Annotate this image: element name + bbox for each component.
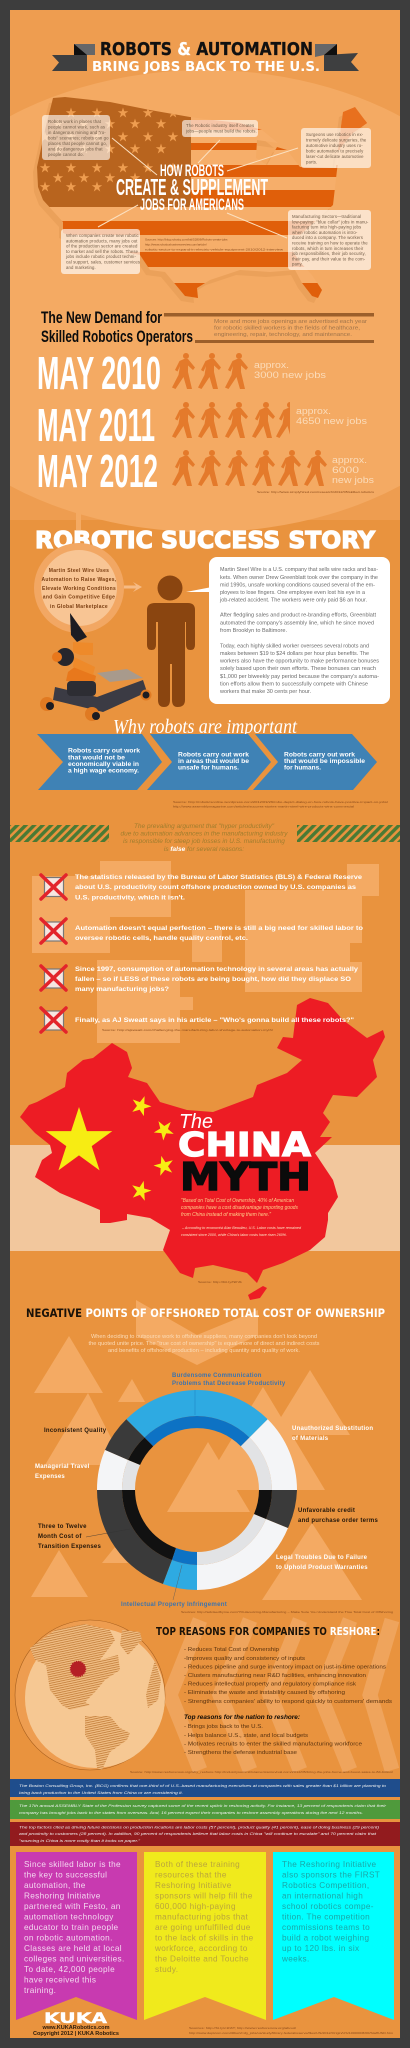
story text: makes between $19 to $24 dollars per hour plus benefits. The bbox=[220, 651, 369, 657]
robot illustration bbox=[40, 613, 152, 721]
South America bbox=[85, 1716, 130, 1770]
map sources: robotic-sector-to-expand-in-electric-vehicle-equipment-2010/2012-interview bbox=[145, 248, 284, 252]
circle callout: Martin Steel Wire: Martin Steel Wire Uses bbox=[49, 568, 109, 574]
banner: Festo training: automation technology bbox=[24, 1912, 114, 1922]
banner: FIRST robotics: up to 120 lbs. in six bbox=[282, 1944, 359, 1953]
KUKA logo: KUKA bbox=[44, 2011, 107, 2027]
banner: Festo training: educator to train people bbox=[24, 1923, 119, 1932]
banner: training resources: resources that the bbox=[155, 1870, 227, 1880]
callout: dangerous work: people cannot work, such as bbox=[48, 124, 105, 130]
company reasons list: - Clusters manufacturing near R&D facilities, enhancing innovation bbox=[184, 1673, 366, 1679]
segment: managerial travel bbox=[97, 1450, 128, 1490]
reason 2 bbox=[41, 919, 363, 943]
banner: training resources: workforce, according to bbox=[154, 1944, 248, 1953]
banner: FIRST robotics: Robotics Competition, bbox=[282, 1881, 369, 1890]
section heading: The New Demand for bbox=[41, 308, 162, 327]
banner: training resources: manufacturing jobs that bbox=[155, 1912, 249, 1922]
chevron sources: http://www.assemblymagazine.com/articles/success-stories-martin-steel-wire-products-wins-commercial bbox=[173, 804, 354, 808]
segment: intellectual property bbox=[163, 1560, 197, 1590]
chevron: high wage economy bbox=[37, 734, 162, 790]
hyper productivity statement: is responsible for steep job losses in U.S. manufacturing bbox=[123, 838, 285, 845]
hazard stripes bbox=[10, 825, 400, 842]
story text: kets. When owner Drew Greenblatt took over the company in the bbox=[220, 575, 378, 581]
banner: Festo training: automation, the bbox=[24, 1881, 86, 1890]
callout: dangerous work: people cannot do. bbox=[48, 152, 84, 157]
banner: FIRST robotics: build a robot weighing bbox=[282, 1934, 369, 1942]
banner: Festo training: on robotic automation. bbox=[24, 1934, 113, 1942]
banner: Festo training: Classes are held at local bbox=[24, 1944, 122, 1953]
banner: Festo training: training. bbox=[24, 1986, 56, 1995]
callout: manufacturing sectors: Manufacturing Sectors—traditional bbox=[292, 214, 361, 219]
story text: job-related accident. The workers were only paid $6 an hour. bbox=[219, 598, 367, 604]
nation reasons list: - Strengthens the defense industrial base bbox=[184, 1750, 297, 1756]
label: transition: Three to Twelve bbox=[38, 1524, 87, 1530]
segment: transition expenses bbox=[97, 1490, 172, 1584]
KUKA credits: Copyright 2012 | KUKA Robotics bbox=[33, 2031, 119, 2037]
nation reasons list bbox=[184, 1715, 362, 1756]
China myth quote: "Based on Total Cost of Ownership, 40% of American bbox=[181, 1198, 294, 1204]
callout: surgeons: parts. bbox=[306, 160, 317, 164]
chevron: impossible for humans: for humans. bbox=[284, 766, 321, 772]
segment: legal troubles bbox=[197, 1519, 288, 1590]
negative points intro bbox=[88, 1334, 320, 1354]
row: May 2012 bbox=[37, 445, 375, 497]
callout connector lines bbox=[98, 138, 298, 238]
heading line 1: ROBOTS & AUTOMATION bbox=[100, 40, 313, 60]
background shapes: chevron and triangles bbox=[31, 1300, 362, 1600]
footer sources: http://www.deptcom.com/dilbert/mfg_jobs/us/study/library-federalreserve/files/US/2012/Origin/US/100000/8/00/StaffUSD.htm bbox=[189, 2031, 394, 2035]
callout: robotics industry: jobs—people must build the robots. bbox=[185, 128, 257, 134]
callout: manufacturing sectors: their pay, and their value to the com- bbox=[292, 256, 366, 261]
banner: FIRST robotics: an international high bbox=[282, 1892, 363, 1900]
flag stars bbox=[46, 1093, 178, 1202]
chevron: impossible for humans: that would be impossible bbox=[284, 759, 366, 765]
nation reasons list: - Brings jobs back to the U.S. bbox=[184, 1724, 263, 1730]
donut chart bbox=[97, 1390, 297, 1590]
chevron: high wage economy: Robots carry out work bbox=[68, 749, 141, 755]
banner: FIRST robotics: also sponsors the FIRST bbox=[282, 1870, 380, 1880]
label: credit: and purchase order terms bbox=[298, 1518, 378, 1524]
reason 3 bbox=[41, 966, 358, 993]
title banner bbox=[52, 40, 359, 75]
banner: Festo training: Since skilled labor is the bbox=[24, 1860, 121, 1869]
US flag map bbox=[30, 90, 380, 305]
callout: manufacturing sectors: job responsibilities, their job security, bbox=[291, 251, 366, 256]
callout: manufacturing sectors: robots, which in turn increases their bbox=[292, 246, 364, 251]
hyper productivity statement: The prevailing argument that "hyper productivity" bbox=[134, 823, 275, 830]
KUKA credits bbox=[33, 2025, 119, 2037]
label: credit: Unfavorable credit bbox=[298, 1508, 355, 1514]
chevron sources bbox=[173, 800, 388, 808]
reason 4: Finally, as AJ Sweatt says in his article – "Who's gonna build all these robots?" bbox=[75, 1017, 354, 1024]
callout: new products: automation products, many jobs out bbox=[66, 238, 138, 243]
China map bbox=[20, 998, 385, 1300]
section intro: More and more jobs openings are advertised each year bbox=[214, 319, 367, 325]
circle callout: Martin Steel Wire bbox=[34, 543, 124, 633]
icon: crossed checkbox bbox=[41, 875, 66, 899]
callout: manufacturing sectors: when robotic automation is intro- bbox=[292, 230, 358, 235]
chevron: impossible for humans bbox=[253, 734, 377, 790]
map sources: Sources: http://blog.robotiq.com/bid/52806/Robots-create-jobs bbox=[145, 238, 228, 242]
hyper productivity statement bbox=[121, 823, 288, 853]
row: May 2011: 4650 new jobs bbox=[296, 416, 368, 426]
section heading bbox=[41, 308, 193, 346]
chevron: high wage economy: a high wage economy. bbox=[68, 769, 139, 775]
negative points intro: and benefits of offshored production – including quantity and quality of work. bbox=[108, 1348, 300, 1354]
worker figure bbox=[147, 576, 195, 707]
ribbon right bbox=[315, 44, 359, 71]
band: top factors: "sourcing in China is more costly than it looks on paper." bbox=[19, 1839, 141, 1843]
story text: workers also have the opportunity to make performance bonuses bbox=[220, 658, 380, 664]
segment: inconsistent quality bbox=[105, 1419, 144, 1460]
Africa edge bbox=[146, 1660, 161, 1708]
icon: location burst bbox=[70, 1662, 86, 1676]
label: communication: Problems that Decrease Productivity bbox=[172, 1381, 286, 1387]
callout: surgeons: laser-cut delicate automotive bbox=[306, 154, 364, 159]
band: Boston Consulting Group: The Boston Consulting Group, Inc. (BCG) confirms that one-third of of U.S.-based manufacturing executives at companies with sales greater than $1 billion are planning to bbox=[19, 1784, 386, 1788]
reason 2: Automation doesn't equal perfection – there is still a big need for skilled labor to bbox=[75, 925, 363, 932]
China myth quote: from China instead of making them here." bbox=[181, 1212, 271, 1218]
chevron: impossible for humans: Robots carry out work bbox=[284, 752, 356, 758]
circle callout: Martin Steel Wire: in Global Marketplace bbox=[50, 604, 108, 610]
callout: new products: to market and sell the robots. These bbox=[66, 249, 139, 254]
band: Assembly survey: The 17th annual ASSEMBLY State of the Profession survey captured some of the recent uptick in reshoring activity. For instance, 13 percent of respondents claim that their bbox=[19, 1804, 387, 1808]
heading: how robots create and supplement: HOW ROBOTS bbox=[160, 162, 224, 180]
callout: manufacturing sectors: receive training on how to operate the bbox=[292, 240, 368, 246]
chevron sources: Source: http://roboticsonline.wordpress.com/2012/03/26/robo-depict-dialog-on-how-robots-have-positive-impact-on-jobs/ bbox=[173, 800, 388, 804]
chevron: unsafe for humans: Robots carry out work bbox=[178, 752, 250, 758]
band: Boston Consulting Group: bring back production to the United States from China or are considering it. bbox=[19, 1791, 183, 1795]
callout: surgeons: automotive industry uses ro- bbox=[306, 143, 363, 148]
flag fill bbox=[37, 97, 367, 298]
circle callout: Martin Steel Wire: Elevate Working Conditions bbox=[42, 586, 116, 592]
row: May 2010: MAY 2010 bbox=[37, 347, 161, 399]
heading: top reasons: TOP REASONS FOR COMPANIES TO RESHORE: bbox=[156, 1625, 380, 1638]
callout: dangerous work bbox=[42, 115, 110, 160]
map sources: http://www.roboticsbusinessreview.com/article/ bbox=[145, 242, 207, 246]
label: quality: Inconsistent Quality bbox=[44, 1428, 107, 1434]
label: travel: Managerial Travel bbox=[35, 1464, 90, 1470]
reason 1: The statistics released by the Bureau of Labor Statistics (BLS) & Federal Reserve bbox=[75, 874, 362, 881]
row: May 2012: approx. bbox=[332, 455, 367, 465]
banner: training resources: to the lack of skills in the bbox=[155, 1934, 254, 1942]
reason 1 bbox=[41, 874, 362, 902]
story speech bubble bbox=[186, 557, 390, 704]
circle callout: Martin Steel Wire: and Gain Competitive Edge bbox=[43, 594, 115, 600]
banner: training resources: Reshoring Initiative bbox=[155, 1881, 232, 1890]
callout: new products: cal support, sales, customer services bbox=[66, 260, 140, 264]
banner: Festo training: Reshoring Initiative bbox=[24, 1892, 101, 1900]
story text: automated the company's assembly line, which he since moved bbox=[220, 620, 374, 626]
China source: Source: http://bit.ly/NIhf1 bbox=[198, 1280, 242, 1284]
callout: manufacturing sectors: facturing turn into high-paying jobs bbox=[292, 225, 361, 230]
banner: FIRST robotics: The Reshoring Initiative bbox=[282, 1860, 377, 1869]
row: May 2012: new jobs bbox=[332, 475, 375, 485]
China myth quote bbox=[181, 1198, 302, 1237]
icon: crossed checkbox bbox=[41, 1008, 66, 1032]
story text: Martin Steel Wire is a U.S. company that sells wire racks and bas- bbox=[220, 567, 378, 573]
company reasons list: - Eliminates the waste and instability caused by offshoring bbox=[184, 1690, 345, 1696]
callout: robotics industry: The Robotic industry itself creates bbox=[186, 123, 254, 128]
company reasons list: - Reduces Total Cost of Ownership bbox=[184, 1647, 279, 1653]
China myth quote: companies have a cost disadvantage importing goods bbox=[181, 1205, 298, 1211]
row: May 2012: 6000 bbox=[332, 465, 359, 475]
negative points intro: the quoted unite price. The "true cost of ownership" is equal-more of direct and indirect costs bbox=[88, 1341, 320, 1347]
chevron: unsafe for humans bbox=[147, 734, 271, 790]
section intro: for robotic skilled workers in the fields of healthcare, bbox=[214, 326, 360, 332]
section intro: engineering, repair, technology, and maintenance. bbox=[214, 332, 352, 338]
heading: why robots are important: Why robots are important bbox=[113, 716, 297, 738]
icon: crossed checkbox bbox=[41, 919, 66, 943]
reason 3: fallen – so if LESS of these robots are being bought, how did they displace SO bbox=[75, 976, 351, 983]
reason 2: oversee robotic cells, handle quality control, etc. bbox=[75, 935, 248, 942]
callout: robotics industry bbox=[182, 120, 258, 137]
robot column bbox=[67, 681, 96, 696]
callout: manufacturing sectors: pany. bbox=[292, 262, 303, 267]
KUKA credits: www.KUKARobotics.com bbox=[41, 2025, 110, 2031]
banner: training resources: the Deloitte and Touche bbox=[155, 1954, 249, 1964]
section heading: Skilled Robotics Operators bbox=[41, 327, 193, 346]
China myth title: The bbox=[179, 1111, 213, 1133]
negative points intro: When deciding to outsource work to offshore suppliers, many companies don't look beyond bbox=[91, 1334, 317, 1340]
band: top factors: The top factors cited as driving future decisions on production locations are labor costs (57 percent), product quality (41 percent), ease of doing business (29 percent) bbox=[19, 1826, 380, 1830]
robot platform bbox=[97, 669, 143, 682]
band: Boston Consulting Group bbox=[10, 1779, 400, 1797]
callout: dangerous work: in dangerous mining and "ro- bbox=[48, 130, 106, 135]
banner: training resources bbox=[144, 1852, 266, 2020]
row: May 2011: MAY 2011 bbox=[37, 399, 155, 451]
story text: solely based upon their own efforts. These bonuses can reach bbox=[220, 666, 376, 672]
donut source: Sources: http://advisedbyme.com/?Outsourcing-Manufacturing – Make Sure You Understand the True Total Cost of Offshoring bbox=[181, 1610, 393, 1614]
chevron: high wage economy: economically viable in bbox=[68, 762, 139, 768]
China myth title: CHINA bbox=[178, 1125, 312, 1164]
icon: crossed checkbox bbox=[41, 966, 66, 990]
reshore source: Source: http://www.reshorenow.org/why_reshore http://industrysummitforamericanrevival.com/2012/05/bring-the-jobs-home-and-boost-sales-to-84-billion/ bbox=[130, 1770, 393, 1774]
label: travel: Expenses bbox=[35, 1474, 65, 1480]
segment: unfavorable credit bbox=[266, 1490, 297, 1528]
callout: surgeons bbox=[301, 128, 371, 168]
heading: robotic success story: ROBOTIC SUCCESS STORY bbox=[35, 528, 375, 554]
hyper productivity statement: is false for several reasons: bbox=[164, 846, 244, 853]
callout: dangerous work: places that people cannot go, bbox=[48, 141, 107, 146]
banner: training resources: are going unfulfilled due bbox=[155, 1923, 251, 1932]
heading: how robots create and supplement: CREATE & SUPPLEMENT bbox=[116, 174, 268, 200]
map shadow bbox=[33, 102, 363, 303]
callout: surgeons: tremely delicate surgeries, the bbox=[306, 138, 367, 142]
company reasons list: - Strengthens companies' ability to respond quickly to customers' demands bbox=[184, 1699, 392, 1705]
banner: FIRST robotics bbox=[273, 1852, 394, 2020]
reason 1: U.S. productivity, which it isn't. bbox=[75, 894, 185, 902]
Hainan bbox=[248, 1286, 267, 1300]
chevron: high wage economy: that would not be bbox=[68, 755, 126, 761]
label: substitution: of Materials bbox=[292, 1436, 329, 1442]
callout: manufacturing sectors: low-paying, "blue collar" jobs in manu- bbox=[292, 219, 369, 224]
callout: dangerous work: bots" scenarios; robots can go bbox=[48, 136, 109, 140]
callout: new products: and marketing. bbox=[66, 265, 96, 270]
story text: tion efforts allow them to successfully compete with Chinese bbox=[220, 682, 368, 688]
banner: training resources: Both of these training bbox=[155, 1860, 240, 1869]
row: May 2012: MAY 2012 bbox=[37, 445, 158, 497]
banner: FIRST robotics: tition. The competition bbox=[282, 1912, 370, 1922]
banner: FIRST robotics: commissions teams to bbox=[282, 1923, 370, 1932]
label: transition: Transition Expenses bbox=[38, 1544, 102, 1550]
North America bbox=[30, 1624, 120, 1710]
label: substitution: Unauthorized Substitution bbox=[292, 1426, 373, 1432]
label: communication: Burdensome Communication bbox=[172, 1373, 262, 1379]
nation reasons list: Top reasons for the nation to reshore: bbox=[184, 1715, 300, 1721]
callout: new products: When companies create new robotic bbox=[66, 233, 140, 238]
band: top factors bbox=[10, 1822, 400, 1846]
company reasons list: -Improves quality and consistency of inputs bbox=[184, 1656, 305, 1662]
banner: training resources: study. bbox=[155, 1965, 178, 1974]
globe bbox=[15, 1620, 165, 1770]
story text: workers that make 30 cents per hour. bbox=[220, 689, 311, 695]
story text: from Brooklyn to Baltimore. bbox=[220, 628, 287, 634]
banner: FIRST robotics: weeks. bbox=[281, 1954, 310, 1964]
callout: surgeons: Surgeons use robotics in ex- bbox=[306, 132, 364, 137]
label: IP: Intellectual Property Infringement bbox=[121, 1602, 227, 1608]
lighter block pattern bbox=[32, 861, 379, 1043]
story text: After fledgling sales and product re-branding efforts, Greenblatt bbox=[220, 612, 377, 618]
background chevrons bbox=[170, 1620, 392, 1770]
story text: ployees to lose fingers. One employee even lost his eye in a bbox=[220, 590, 365, 596]
story text: mid 1990s, unsafe working conditions caused several of the em- bbox=[220, 582, 375, 588]
callout: new products: jobs include robotic product techni- bbox=[65, 254, 136, 259]
footer sources: Sources: http://ht.ly/c1b6T; http://www.reshorenow.org/about/ bbox=[189, 2026, 296, 2030]
callout: dangerous work: Robots work in places that bbox=[48, 119, 102, 124]
callout: surgeons: botic automation to precisely bbox=[306, 148, 364, 154]
company reasons list: - Reduces pipeline and surge inventory impact on just-in-time operations bbox=[184, 1664, 386, 1670]
source: Source: http://www.simplyhired.com/research/2012/05/skilled-robotics bbox=[257, 490, 375, 494]
label: warranties: Legal Troubles Due to Failure bbox=[276, 1555, 368, 1561]
banner: FIRST robotics: school robotics compe- bbox=[282, 1902, 374, 1911]
banner: training resources: 600,000 high-paying bbox=[155, 1902, 236, 1911]
reason 1: about U.S. productivity count offshore production owned by U.S. companies as bbox=[75, 884, 356, 891]
nation reasons list: - Helps balance U.S., state, and local budgets bbox=[184, 1733, 308, 1739]
band: top factors: and proximity to customers (28 percent). In addition, 90 percent of respondents believe that labor costs in China "will continue to escalate" and 70 percent claim that bbox=[19, 1832, 377, 1836]
segment: communication bbox=[126, 1390, 268, 1438]
callout: new products: of the production sector are created bbox=[66, 244, 138, 249]
China myth quote: – According to economist Alan Beaulieu, U.S. Labor costs have remained bbox=[181, 1226, 302, 1230]
reason 4 bbox=[41, 1008, 354, 1032]
company reasons list bbox=[184, 1647, 392, 1705]
wheels bbox=[40, 690, 152, 721]
story text bbox=[219, 567, 380, 695]
row: May 2011 bbox=[38, 402, 367, 442]
callout: manufacturing sectors bbox=[288, 210, 371, 270]
banner: Festo training bbox=[16, 1852, 137, 2020]
ribbon left bbox=[52, 44, 95, 71]
China myth title bbox=[178, 1111, 312, 1199]
band: Assembly survey: company has brought jobs back to the states from overseas. And, 16 percent expect their companies to reshore assembly operations during the next 12 months. bbox=[19, 1811, 363, 1815]
segment: unauthorized substitution bbox=[250, 1419, 297, 1490]
heading: how robots create and supplement bbox=[116, 162, 268, 214]
story text: Today, each highly skilled worker oversees several robots and bbox=[220, 644, 369, 650]
banner: Festo training: colleges and universities. bbox=[24, 1954, 125, 1964]
label: transition: Month Cost of bbox=[38, 1534, 82, 1540]
banner: Festo training: To date, 42,000 people bbox=[24, 1965, 115, 1974]
band: Assembly survey bbox=[10, 1800, 400, 1819]
Greenland bbox=[120, 1630, 142, 1655]
banner: Festo training: partnered with Festo, an bbox=[24, 1902, 121, 1911]
callout: dangerous work: and do dangerous jobs that bbox=[48, 146, 103, 152]
reason 4: Source: http://ajsweatt.com/challenging-the-manufacturing-labor-shortage-to-automation-myth/ bbox=[102, 1028, 273, 1032]
China myth title: MYTH bbox=[180, 1155, 311, 1199]
reason 3: many manufacturing jobs? bbox=[75, 986, 169, 993]
section intro bbox=[214, 319, 367, 338]
China myth band bbox=[10, 1145, 400, 1251]
callout: manufacturing sectors: duced into a company. The workers bbox=[292, 235, 363, 240]
arrow to worker bbox=[124, 582, 142, 592]
banner: training resources: sponsors will help fill the bbox=[155, 1892, 253, 1900]
section: skilled robotics operators bbox=[37, 308, 375, 497]
nation reasons list: - Motivates recruits to enter the skilled manufacturing workforce bbox=[184, 1742, 362, 1748]
callout: new products bbox=[61, 229, 140, 274]
chevron: unsafe for humans: unsafe for humans. bbox=[178, 766, 239, 772]
label: warranties: to Uphold Product Warranties bbox=[276, 1565, 368, 1571]
map sources bbox=[145, 238, 284, 252]
row: May 2010: approx. bbox=[254, 360, 289, 370]
row: May 2010: 3000 new jobs bbox=[254, 370, 327, 380]
chevron: unsafe for humans: in areas that would be bbox=[178, 759, 250, 765]
robot arm bbox=[52, 613, 96, 681]
reason 3: Since 1997, consumption of automation technology in several areas has actually bbox=[75, 966, 358, 973]
company reasons list: - Reduces intellectual property and regulatory compliance risk bbox=[184, 1682, 356, 1688]
banner: Festo training: have received this bbox=[24, 1976, 96, 1984]
hyper productivity statement: due to automation advances in the manufacturing industry bbox=[121, 830, 288, 838]
heading line 2: BRING JOBS BACK TO THE U.S. bbox=[92, 59, 320, 75]
story text: $1,000 per biweekly pay period because the company's automa- bbox=[220, 674, 379, 680]
circle callout: Martin Steel Wire: Automation to Raise Wages, bbox=[41, 577, 117, 583]
robot base bbox=[53, 680, 147, 712]
China myth quote: consistent since 2000, while China's labor costs have risen 260%. bbox=[181, 1233, 287, 1237]
heading: how robots create and supplement: JOBS FOR AMERICANS bbox=[140, 196, 244, 214]
footer sources bbox=[189, 2026, 394, 2035]
row: May 2011: approx. bbox=[296, 406, 331, 416]
donut labels bbox=[35, 1373, 378, 1608]
banner: Festo training: the key to successful bbox=[24, 1870, 107, 1880]
